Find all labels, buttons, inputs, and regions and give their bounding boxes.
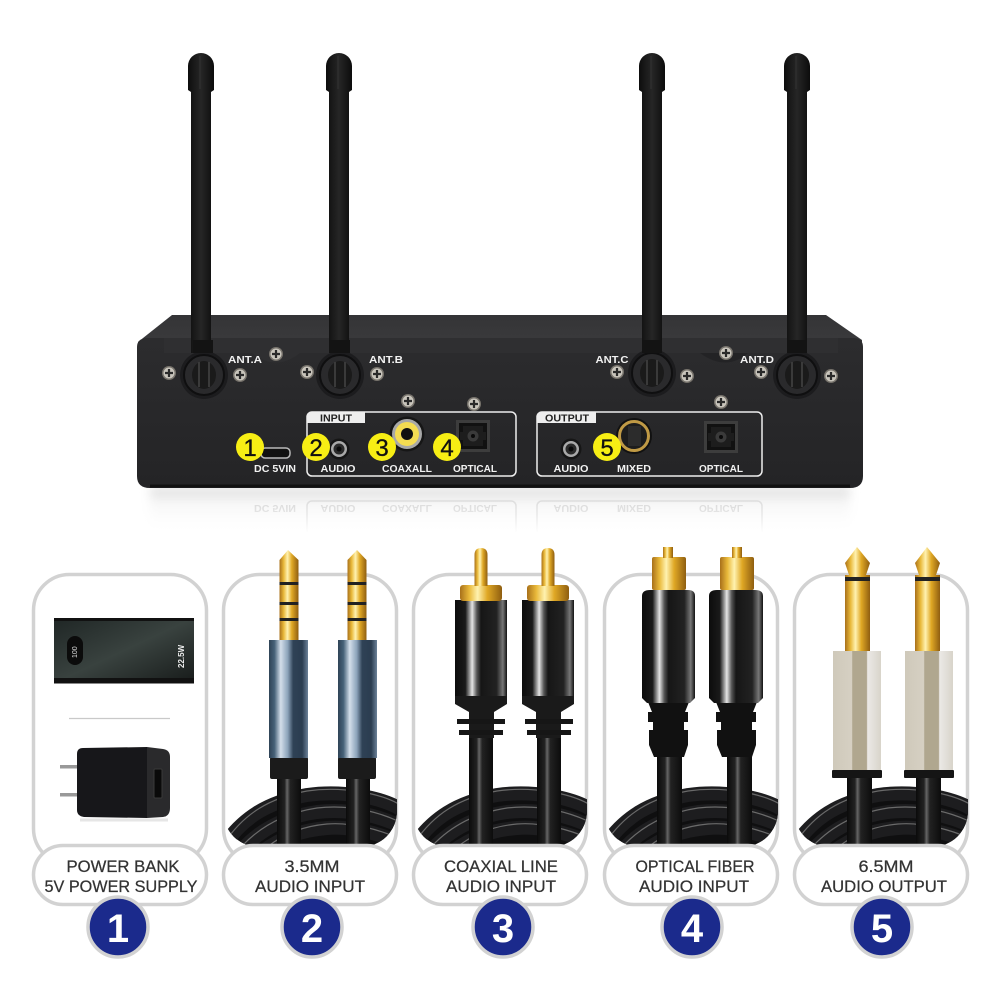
input panel: AUDIO [320,464,356,475]
icon: power bank [54,618,194,684]
mount D [773,351,821,399]
number badge 5: 5 [871,907,893,951]
antenna C [639,53,665,353]
callout 1 [236,433,264,462]
number badge 3: 3 [492,907,514,951]
output optical port [704,421,738,453]
USB-C port: DC 5VIN [254,464,296,475]
number badge 1 [88,897,148,957]
device reflection: COAXALL [382,502,432,513]
device reflection: DC 5VIN [254,502,296,513]
screws [162,346,838,411]
6.5mm plug left [832,547,882,848]
coaxial port [390,416,424,452]
label pill 1: POWER BANK [66,857,180,876]
label pill 5 [794,846,968,904]
optical plug right [709,547,763,848]
6.5mm plug right [904,547,954,848]
mixed 6.5mm jack [616,418,652,454]
label pill 2: AUDIO INPUT [255,877,365,896]
receiver device [137,53,863,488]
device rear face [137,338,863,488]
RCA plug left [455,548,507,848]
device reflection: OPTICAL [699,502,743,513]
input optical port [456,420,490,452]
callout 1: 1 [243,435,257,462]
3.5mm plug left [269,550,308,848]
label pill 2 [224,846,396,904]
antenna A [188,53,214,353]
panel: 3.5mm cables [222,550,402,864]
number badge 3 [473,897,533,957]
label pill 3: AUDIO INPUT [446,877,556,896]
panel: power bank and adapter [34,574,206,864]
device reflection: AUDIO [320,502,356,513]
icon: power bank: 100 [72,646,79,658]
callout 4 [433,433,461,462]
callout 3: 3 [375,435,389,462]
label pill 5: 6.5MM [858,857,914,876]
device reflection [148,488,852,526]
optical plug left [642,547,695,848]
input panel [307,412,516,476]
antenna labels: ANT.D [740,355,774,366]
output panel: MIXED [617,464,651,475]
number badge 2 [282,897,342,957]
output panel: AUDIO [554,464,589,475]
antenna labels: ANT.C [596,355,628,366]
panel: coaxial cables [412,548,592,864]
input panel: COAXALL [382,464,432,475]
callout 5 [593,433,621,462]
label pill 1 [34,846,206,904]
antenna B [326,53,352,353]
input panel: INPUT [320,414,352,424]
label pill 2: 3.5MM [284,857,340,876]
callout 2 [302,433,330,462]
output panel: OPTICAL [699,464,743,475]
number badge 5 [852,897,912,957]
label pill 3 [414,846,586,904]
RCA plug right [522,548,574,848]
mount B [316,351,364,399]
USB-C port [254,448,296,475]
label pill 4: AUDIO INPUT [639,877,749,896]
number badge 4 [662,897,722,957]
device reflection: AUDIO [554,502,589,513]
input audio jack [328,438,350,460]
label pill 3: COAXIAL LINE [444,857,558,876]
3.5mm plug right [338,550,377,848]
antenna stems [193,340,807,353]
number badge 1: 1 [107,907,129,951]
mount C [628,349,676,397]
device reflection: OPTICAL [453,502,497,513]
mount A [180,351,228,399]
output panel [537,412,762,476]
antenna labels: ANT.A [228,355,262,366]
antenna labels: ANT.B [369,355,403,366]
icon: wall adapter [60,747,170,820]
device reflection: MIXED [617,502,651,513]
antenna D [784,53,810,353]
callout 3 [368,433,396,462]
number badge 2: 2 [301,907,323,951]
icon: power bank: 22.5W [177,644,186,668]
device top panel [138,315,862,350]
number badge 4: 4 [681,907,704,951]
panel: optical cables [603,547,783,864]
callout 4: 4 [440,435,454,462]
output panel: OUTPUT [545,414,589,424]
label pill 1: 5V POWER SUPPLY [44,877,198,896]
callout 2: 2 [309,435,323,462]
label pill 5: AUDIO OUTPUT [821,877,947,896]
label pill 4 [604,846,778,904]
label pill 4: OPTICAL FIBER [636,857,754,876]
panel: 6.5mm cables [793,547,973,864]
input panel: OPTICAL [453,464,497,475]
antenna labels [228,355,774,366]
callout 5: 5 [600,435,614,462]
output audio jack [560,438,582,460]
